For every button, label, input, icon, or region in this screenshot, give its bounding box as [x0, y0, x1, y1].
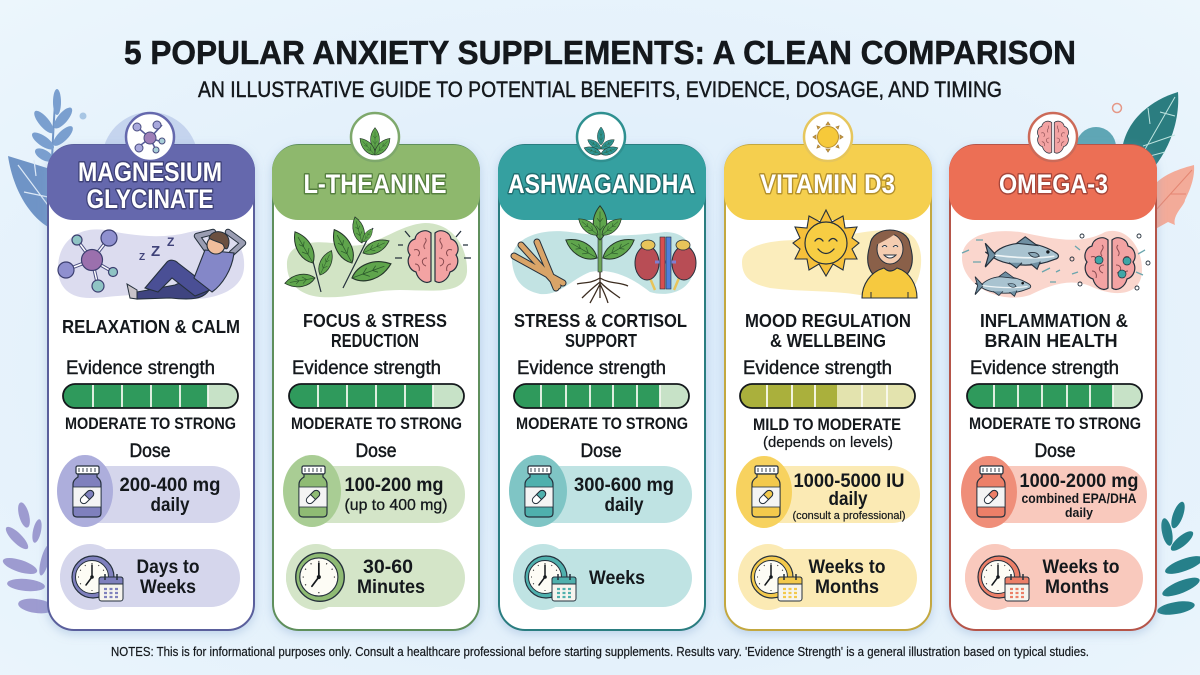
benefit: FOCUS & STRESS — [303, 311, 447, 331]
timing pill — [286, 544, 465, 610]
timing pill: 30-60 — [363, 557, 413, 578]
evidence rating: MILD TO MODERATE — [753, 415, 901, 434]
evidence rating: MODERATE TO STRONG — [65, 414, 236, 433]
evidence rating — [753, 415, 901, 451]
evidence bar — [63, 384, 238, 408]
benefit — [980, 311, 1128, 351]
title: 5 POPULAR ANXIETY SUPPLEMENTS: A CLEAN COMPARISON — [124, 34, 1076, 71]
dose pill — [57, 455, 240, 527]
heading: MAGNESIUM — [78, 157, 222, 187]
illustration: tea leaves and brain — [284, 216, 471, 297]
benefit: & WELLBEING — [770, 331, 886, 351]
icon: leaf badge — [351, 113, 399, 161]
timing pill: Weeks — [140, 577, 196, 598]
timing pill: Months — [1045, 577, 1109, 598]
dose label: Dose — [130, 441, 170, 462]
dose pill — [509, 455, 692, 527]
header — [498, 145, 706, 220]
header — [272, 145, 480, 220]
header — [724, 145, 932, 220]
illustration: smiling sun and woman — [742, 210, 921, 298]
panel: Omega-3 — [949, 113, 1157, 630]
dose pill: 300-600 mg — [574, 475, 674, 496]
illustration: plant, roots and kidneys — [512, 206, 696, 303]
benefit: REDUCTION — [331, 331, 419, 351]
benefit: STRESS & CORTISOL — [514, 311, 687, 331]
subtitle: AN ILLUSTRATIVE GUIDE TO POTENTIAL BENEFITS, EVIDENCE, DOSAGE, AND TIMING — [198, 77, 1002, 102]
heading: OMEGA-3 — [999, 169, 1108, 199]
evidence label: Evidence strength — [743, 358, 892, 379]
dose pill: 200-400 mg — [120, 475, 220, 496]
timing pill: Days to — [136, 557, 200, 578]
timing pill — [965, 544, 1143, 610]
dose label: Dose — [1034, 441, 1076, 462]
benefit — [303, 311, 447, 351]
illustration: fish and brain — [962, 231, 1150, 298]
evidence label: Evidence strength — [66, 358, 215, 379]
illustration: molecule and relaxed person: Z — [167, 235, 174, 249]
dose pill: 100-200 mg — [344, 475, 444, 496]
benefit — [514, 311, 687, 351]
header — [949, 145, 1157, 220]
panel: Ashwagandha — [498, 113, 706, 630]
dose pill: 1000-5000 IU — [794, 471, 904, 492]
benefit: RELAXATION & CALM — [62, 317, 240, 337]
evidence label: Evidence strength — [517, 358, 666, 379]
benefit — [745, 311, 911, 351]
timing pill: Weeks to — [1042, 557, 1120, 578]
dose label: Dose — [356, 441, 396, 462]
heading: VITAMIN D3 — [760, 169, 895, 199]
timing pill: Months — [815, 577, 879, 598]
illustration: molecule and relaxed person: Z — [139, 252, 145, 263]
timing pill — [60, 544, 240, 610]
panel: L-Theanine — [272, 113, 480, 630]
timing pill: Weeks — [589, 568, 645, 589]
panel: Magnesium Glycinate — [47, 113, 255, 630]
heading — [78, 157, 222, 214]
decoration: top-right foliage — [1076, 92, 1194, 232]
heading: GLYCINATE — [86, 184, 214, 214]
decoration: bottom-left foliage — [1, 501, 55, 615]
icon: sun badge — [804, 113, 852, 161]
evidence rating: MODERATE TO STRONG — [969, 414, 1141, 433]
timing pill: Minutes — [357, 577, 425, 598]
illustration: molecule and relaxed person: Z — [151, 243, 160, 260]
evidence bar — [289, 384, 464, 408]
evidence bar — [514, 384, 689, 408]
decoration: bottom-right foliage — [1156, 500, 1200, 617]
illustration: molecule and relaxed person — [58, 229, 244, 299]
dose pill: daily — [1065, 505, 1094, 520]
dose pill — [283, 455, 465, 527]
timing pill: Weeks to — [808, 557, 886, 578]
evidence label: Evidence strength — [292, 358, 441, 379]
icon: brain badge — [1029, 113, 1077, 161]
benefit: SUPPORT — [565, 331, 637, 351]
evidence rating: MODERATE TO STRONG — [291, 414, 462, 433]
evidence rating: MODERATE TO STRONG — [516, 414, 688, 433]
dose label: Dose — [580, 441, 622, 462]
icon: molecule badge — [126, 113, 174, 161]
heading: ASHWAGANDHA — [508, 169, 695, 199]
dose pill — [961, 456, 1147, 528]
header — [47, 145, 255, 220]
benefit: INFLAMMATION & — [980, 311, 1128, 331]
evidence rating: (depends on levels) — [763, 434, 893, 451]
evidence bar — [740, 384, 915, 408]
dose pill: daily — [150, 495, 190, 516]
dose pill: (up to 400 mg) — [344, 497, 448, 514]
dose pill: (consult a professional) — [792, 510, 906, 522]
timing pill — [513, 544, 692, 610]
benefit: MOOD REGULATION — [745, 311, 911, 331]
panel: Vitamin D3 — [724, 113, 932, 630]
timing pill — [738, 544, 917, 610]
icon: plant badge — [577, 113, 625, 161]
dose pill: combined EPA/DHA — [1022, 490, 1136, 506]
dose pill: 1000-2000 mg — [1020, 471, 1138, 492]
footnote: NOTES: This is for informational purposes only. Consult a healthcare professional before starting supplements. Results vary. 'Evidence Strength' is a general illustration based on typical studies. — [111, 645, 1089, 659]
evidence bar — [967, 384, 1142, 408]
dose pill — [736, 456, 920, 528]
heading: L-THEANINE — [304, 169, 446, 199]
benefit: BRAIN HEALTH — [984, 331, 1118, 351]
dose pill: daily — [604, 495, 644, 516]
dose pill: daily — [828, 489, 868, 510]
decoration: top-left foliage — [8, 89, 198, 232]
evidence label: Evidence strength — [970, 358, 1119, 379]
